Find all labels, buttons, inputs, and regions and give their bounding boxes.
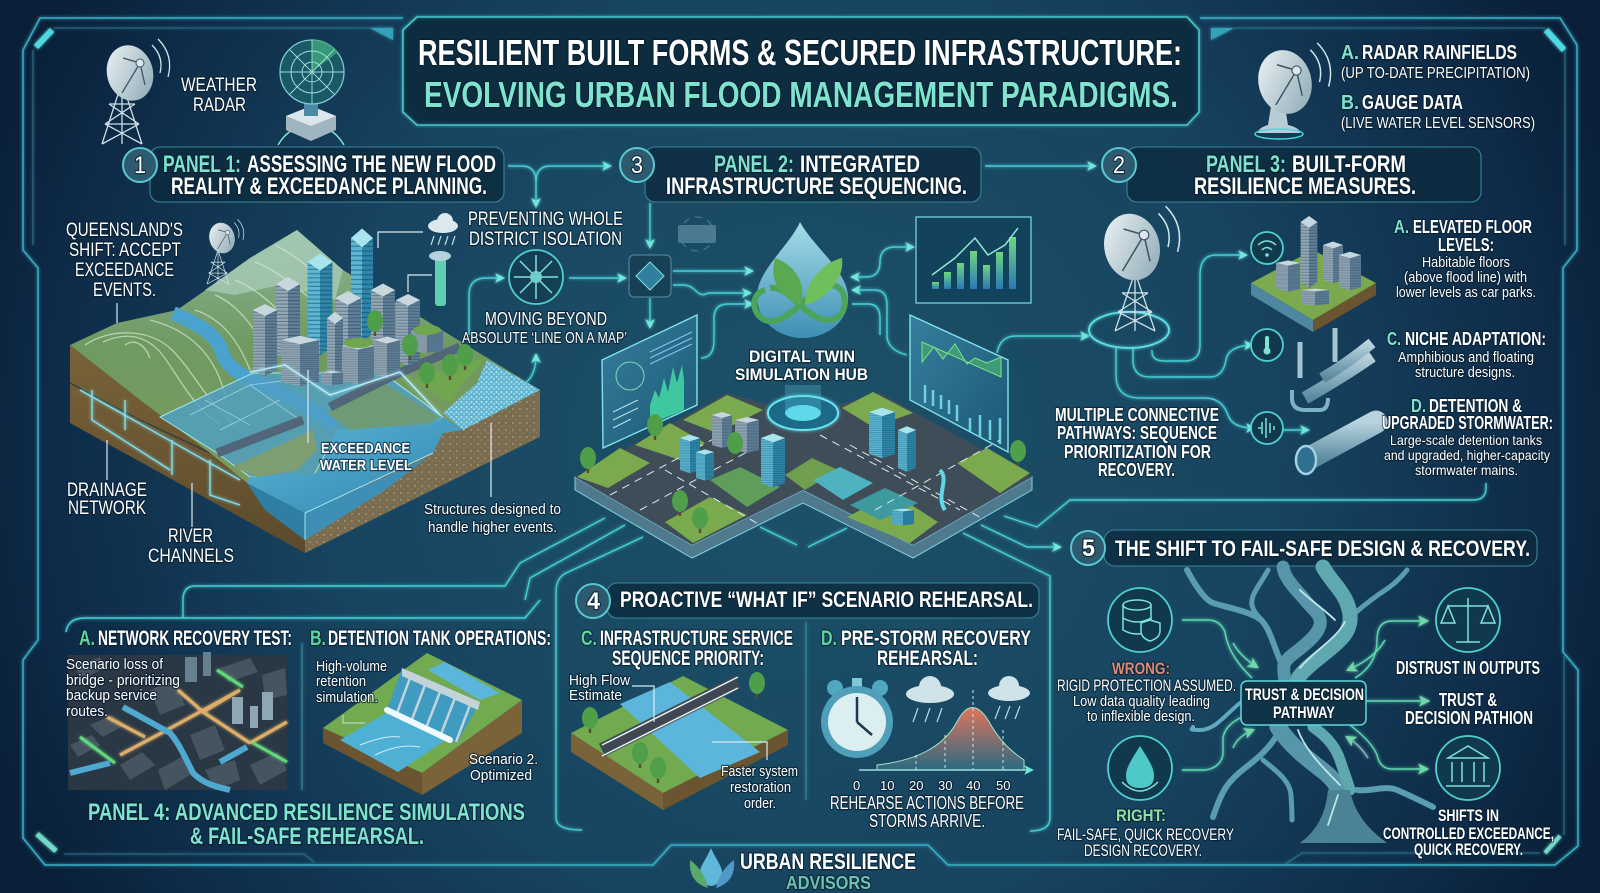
illustration: network map	[68, 652, 287, 790]
heading C: C.	[581, 627, 597, 650]
legend: radar rainfields: A.	[1341, 42, 1359, 64]
illustration: bridge over channel	[571, 672, 788, 810]
label multiple pathways: PRIORITIZATION FOR	[1064, 442, 1211, 462]
badge 2	[1102, 148, 1136, 182]
icon: leaf drop logo	[690, 848, 734, 888]
hub down arrow	[802, 420, 804, 577]
icon: faint scanner	[678, 217, 716, 251]
text B callouts: High-volume	[316, 658, 387, 675]
section 5 fail-safe design	[1057, 530, 1554, 860]
badge 2: 2	[1113, 152, 1125, 179]
drainage pipes	[80, 390, 240, 505]
city buildings	[253, 228, 473, 388]
mountain top	[205, 230, 343, 300]
heading B: DETENTION TANK OPERATIONS:	[328, 627, 551, 650]
label D detention: stormwater mains.	[1415, 462, 1518, 478]
left soil face	[70, 345, 305, 553]
icon: sensor node box	[629, 255, 671, 297]
label shifts: QUICK RECOVERY.	[1414, 840, 1523, 859]
panel 3 heading text: PANEL 3:	[1206, 151, 1286, 178]
label D detention: and upgraded, higher-capacity	[1384, 447, 1550, 463]
text C callouts: Estimate	[569, 687, 622, 704]
panel 1 heading text: PANEL 1:	[163, 151, 241, 178]
icon: database shield	[1108, 588, 1172, 652]
panel 1 text labels	[66, 209, 627, 567]
label right	[1057, 806, 1234, 860]
panel 4 caption: & FAIL-SAFE REHEARSAL.	[190, 823, 424, 850]
label: moving beyond: MOVING BEYOND	[485, 309, 607, 329]
label D detention: DETENTION &	[1429, 396, 1522, 416]
legend: gauge data: GAUGE DATA	[1362, 92, 1463, 114]
text D body: REHEARSE ACTIONS BEFORE	[830, 793, 1024, 813]
label: exceedance water level	[320, 440, 412, 474]
trust decision box	[1241, 681, 1366, 725]
chart: storm hydrograph: 50	[996, 778, 1010, 793]
label distrust: DISTRUST IN OUTPUTS	[1396, 658, 1540, 678]
label: queensland's shift	[66, 220, 183, 301]
text C callouts: Faster system	[721, 763, 798, 780]
label: queensland's shift: EVENTS.	[93, 280, 156, 301]
text C callouts: order.	[744, 795, 776, 812]
footer logo	[690, 848, 916, 893]
label wrong: Low data quality leading	[1073, 693, 1210, 710]
panel 1 heading text	[163, 151, 496, 200]
label: moving beyond	[462, 309, 627, 347]
chart: storm hydrograph: 0	[853, 778, 860, 793]
text C callouts: restoration	[730, 779, 791, 796]
label A elevated floors: lower levels as car parks.	[1396, 284, 1536, 301]
flow arrows	[1182, 620, 1428, 770]
label: structures	[424, 501, 561, 536]
heading A	[79, 627, 292, 650]
wordmark: URBAN RESILIENCE	[740, 849, 916, 874]
section heading: 5	[1082, 535, 1095, 562]
icon: thermometer	[1251, 329, 1283, 361]
label C niche adaptation: C.	[1387, 329, 1401, 349]
heading B: B.	[310, 627, 326, 650]
text A body: bridge - prioritizing	[66, 672, 180, 689]
label right: RIGHT:	[1116, 806, 1166, 825]
icon: rain clouds	[906, 676, 1030, 722]
hub label: DIGITAL TWIN	[749, 347, 855, 366]
weather radar block	[101, 39, 344, 145]
label: structures: handle higher events.	[428, 519, 557, 536]
label trust pathway: DECISION PATHION	[1405, 708, 1533, 728]
legend: radar rainfields: (UP TO-DATE PRECIPITATION)	[1341, 65, 1530, 82]
flood water zone	[160, 373, 443, 477]
panel 1 illustration: isometric flood terrain	[70, 213, 540, 553]
label: preventing isolation: DISTRICT ISOLATION	[469, 229, 622, 250]
label A elevated floors: A.	[1394, 217, 1409, 237]
panel 3 heading text: RESILIENCE MEASURES.	[1194, 173, 1416, 200]
icon: stopwatch	[821, 678, 893, 758]
chart: storm hydrograph: 40	[966, 778, 980, 793]
icon: dish tower	[1089, 206, 1180, 348]
label: exceedance water level: WATER LEVEL	[320, 457, 412, 474]
label: weather radar	[181, 75, 257, 116]
panel 3 header	[1102, 147, 1481, 202]
label: queensland's shift: EXCEEDANCE	[75, 260, 174, 281]
river	[173, 313, 335, 425]
roads	[217, 347, 460, 453]
text B callouts: Scenario 2.	[469, 751, 538, 768]
contour lines	[85, 245, 328, 425]
label D detention: Large-scale detention tanks	[1390, 432, 1542, 448]
icon: balance scale	[1436, 588, 1500, 652]
icon: water drop	[1108, 736, 1172, 800]
label trust pathway: TRUST &	[1439, 690, 1497, 710]
legend: radar rainfields	[1341, 42, 1530, 82]
label: weather radar: RADAR	[193, 95, 246, 116]
hub logo: water drop with leaves	[754, 222, 848, 338]
hub isometric city platform	[575, 385, 1032, 558]
label wrong: RIGID PROTECTION ASSUMED.	[1057, 676, 1236, 695]
icon: satellite dish	[1252, 43, 1331, 139]
label D detention	[1382, 396, 1553, 478]
text D body: STORMS ARRIVE.	[869, 811, 985, 831]
bank land	[232, 430, 317, 477]
text A body	[66, 656, 180, 720]
text C callouts: High Flow	[569, 672, 630, 689]
text B callouts: retention	[316, 673, 366, 690]
panel 3 heading text	[1194, 151, 1416, 200]
panel 1 heading text: REALITY & EXCEEDANCE PLANNING.	[171, 173, 487, 200]
icon: dish tower	[101, 39, 170, 144]
panel 2 heading text: INFRASTRUCTURE SEQUENCING.	[666, 173, 967, 200]
badge 1: 1	[134, 152, 146, 179]
label multiple pathways: MULTIPLE CONNECTIVE	[1055, 405, 1219, 425]
icon: sound wave	[1251, 412, 1283, 444]
label: exceedance water level: EXCEEDANCE	[321, 440, 410, 457]
label multiple pathways: PATHWAYS: SEQUENCE	[1057, 423, 1217, 443]
title panel: RESILIENT BUILT FORMS & SECURED INFRASTRUCTURE:	[418, 32, 1182, 73]
badge 1	[123, 148, 157, 182]
heading A: A.	[79, 627, 95, 650]
label wrong	[1057, 659, 1236, 725]
legend: gauge data: (LIVE WATER LEVEL SENSORS)	[1341, 115, 1535, 132]
badge 3	[620, 148, 654, 182]
title panel	[403, 17, 1199, 125]
label trust pathway	[1405, 690, 1533, 728]
trust decision box: PATHWAY	[1273, 703, 1336, 722]
chart panel	[916, 217, 1031, 303]
icon: wifi	[1251, 232, 1283, 264]
panel 4 caption	[88, 799, 525, 850]
label D detention: D.	[1411, 396, 1426, 416]
panel 4 caption: PANEL 4: ADVANCED RESILIENCE SIMULATIONS	[88, 799, 525, 826]
top right sources block	[1252, 42, 1535, 139]
label multiple pathways	[1055, 405, 1219, 480]
legend: gauge data	[1341, 92, 1535, 132]
panel 2 heading text	[666, 151, 967, 200]
label shifts	[1383, 806, 1554, 859]
heading C: INFRASTRUCTURE SERVICE	[600, 627, 793, 650]
label C niche adaptation: structure designs.	[1415, 364, 1515, 381]
label: river channels: RIVER	[168, 526, 213, 547]
label: river channels	[148, 526, 234, 567]
text B callouts	[316, 658, 538, 784]
land surface	[70, 230, 540, 513]
section heading	[576, 583, 1039, 618]
label A elevated floors: (above flood line) with	[1404, 269, 1527, 286]
label C niche adaptation	[1387, 329, 1546, 381]
illustration: amphibious pipes	[1292, 328, 1372, 410]
section heading: PROACTIVE “WHAT IF” SCENARIO REHEARSAL.	[620, 587, 1033, 612]
callout leader lines	[107, 232, 491, 527]
text A body: Scenario loss of	[66, 656, 164, 673]
label C niche adaptation: NICHE ADAPTATION:	[1405, 329, 1546, 349]
panel 2 heading text: PANEL 2:	[714, 151, 794, 178]
label: preventing isolation: PREVENTING WHOLE	[468, 209, 623, 230]
icon: institution	[1436, 736, 1500, 800]
central hub	[575, 217, 1032, 577]
chart: storm hydrograph	[853, 690, 1032, 793]
panel 4 simulations	[66, 627, 551, 850]
label: river channels: CHANNELS	[148, 546, 234, 567]
chart: storm hydrograph: 30	[938, 778, 952, 793]
coastal park	[410, 357, 487, 403]
heading D: REHEARSAL:	[877, 647, 978, 670]
illustration: elevated buildings	[1251, 216, 1376, 332]
text A body: backup service	[66, 687, 157, 704]
panel 1 header	[123, 147, 504, 202]
heading C	[581, 627, 793, 670]
panel 1 heading text: ASSESSING THE NEW FLOOD	[247, 151, 496, 178]
what-if rehearsal section	[569, 583, 1039, 831]
label shifts: SHIFTS IN	[1438, 806, 1499, 825]
text B callouts: Optimized	[470, 767, 532, 784]
label: moving beyond: ABSOLUTE ‘LINE ON A MAP’	[462, 330, 627, 347]
heading C: SEQUENCE PRIORITY:	[612, 647, 764, 670]
label A elevated floors: LEVELS:	[1438, 235, 1494, 255]
text A body: routes.	[66, 703, 108, 720]
label A elevated floors: Habitable floors	[1422, 254, 1510, 271]
title panel: EVOLVING URBAN FLOOD MANAGEMENT PARADIGMS.	[424, 74, 1178, 115]
label A elevated floors: ELEVATED FLOOR	[1413, 217, 1532, 237]
panel 2 heading text: INTEGRATED	[800, 151, 920, 178]
chart: storm hydrograph: 20	[909, 778, 923, 793]
label wrong: WRONG:	[1112, 659, 1170, 678]
panel 3 measures	[1055, 206, 1553, 480]
label: drainage network	[67, 480, 147, 519]
flooded street grid	[190, 380, 300, 430]
heading D: D.	[821, 627, 837, 650]
text D body	[830, 793, 1024, 831]
label: queensland's shift: QUEENSLAND'S	[66, 220, 183, 241]
icon: rain cloud	[428, 213, 458, 245]
chart: storm hydrograph: 10	[880, 778, 894, 793]
label: weather radar: WEATHER	[181, 75, 257, 96]
trust decision box: TRUST & DECISION	[1245, 685, 1364, 704]
section heading: 4	[587, 588, 601, 615]
wordmark	[740, 849, 916, 893]
legend: gauge data: B.	[1341, 92, 1359, 114]
label wrong: to inflexible design.	[1087, 708, 1195, 725]
icon: network node	[509, 250, 563, 304]
text C callouts	[569, 672, 798, 812]
label: drainage network: NETWORK	[68, 498, 146, 519]
wordmark: ADVISORS	[786, 873, 871, 893]
icon: radar scope	[278, 40, 344, 145]
heading D	[821, 627, 1031, 670]
heading A: NETWORK RECOVERY TEST:	[98, 627, 292, 650]
hub label	[735, 347, 868, 384]
illustration: trust river tree	[1187, 567, 1433, 843]
hub label: SIMULATION HUB	[735, 365, 868, 384]
panel 3 heading text: BUILT-FORM	[1292, 151, 1406, 178]
label: preventing isolation	[468, 209, 623, 250]
label: structures: Structures designed to	[424, 501, 561, 518]
panel 2 header	[620, 147, 981, 202]
icon: gauge tube	[429, 251, 451, 306]
right soil face	[247, 390, 540, 553]
left holo screen	[602, 315, 697, 448]
section heading	[1071, 530, 1537, 566]
label A elevated floors	[1394, 217, 1536, 301]
label right: DESIGN RECOVERY.	[1084, 841, 1202, 860]
heading D: PRE-STORM RECOVERY	[841, 627, 1031, 650]
small dish on hill	[206, 219, 244, 284]
main water body	[247, 417, 463, 513]
connector arrows	[66, 166, 1486, 831]
text B callouts: simulation.	[316, 689, 378, 706]
label right: FAIL-SAFE, QUICK RECOVERY	[1057, 825, 1234, 844]
right holo screen	[910, 315, 1008, 452]
legend: radar rainfields: RADAR RAINFIELDS	[1362, 42, 1517, 64]
label multiple pathways: RECOVERY.	[1098, 460, 1175, 480]
label: queensland's shift: SHIFT: ACCEPT	[69, 240, 181, 261]
label: drainage network: DRAINAGE	[67, 480, 147, 501]
label C niche adaptation: Amphibious and floating	[1398, 349, 1534, 366]
illustration: stormwater main	[1296, 422, 1376, 474]
heading B	[310, 627, 551, 650]
badge 3: 3	[631, 152, 643, 179]
exceedance line and glow outline	[250, 365, 440, 415]
illustration: detention dam	[323, 653, 522, 795]
